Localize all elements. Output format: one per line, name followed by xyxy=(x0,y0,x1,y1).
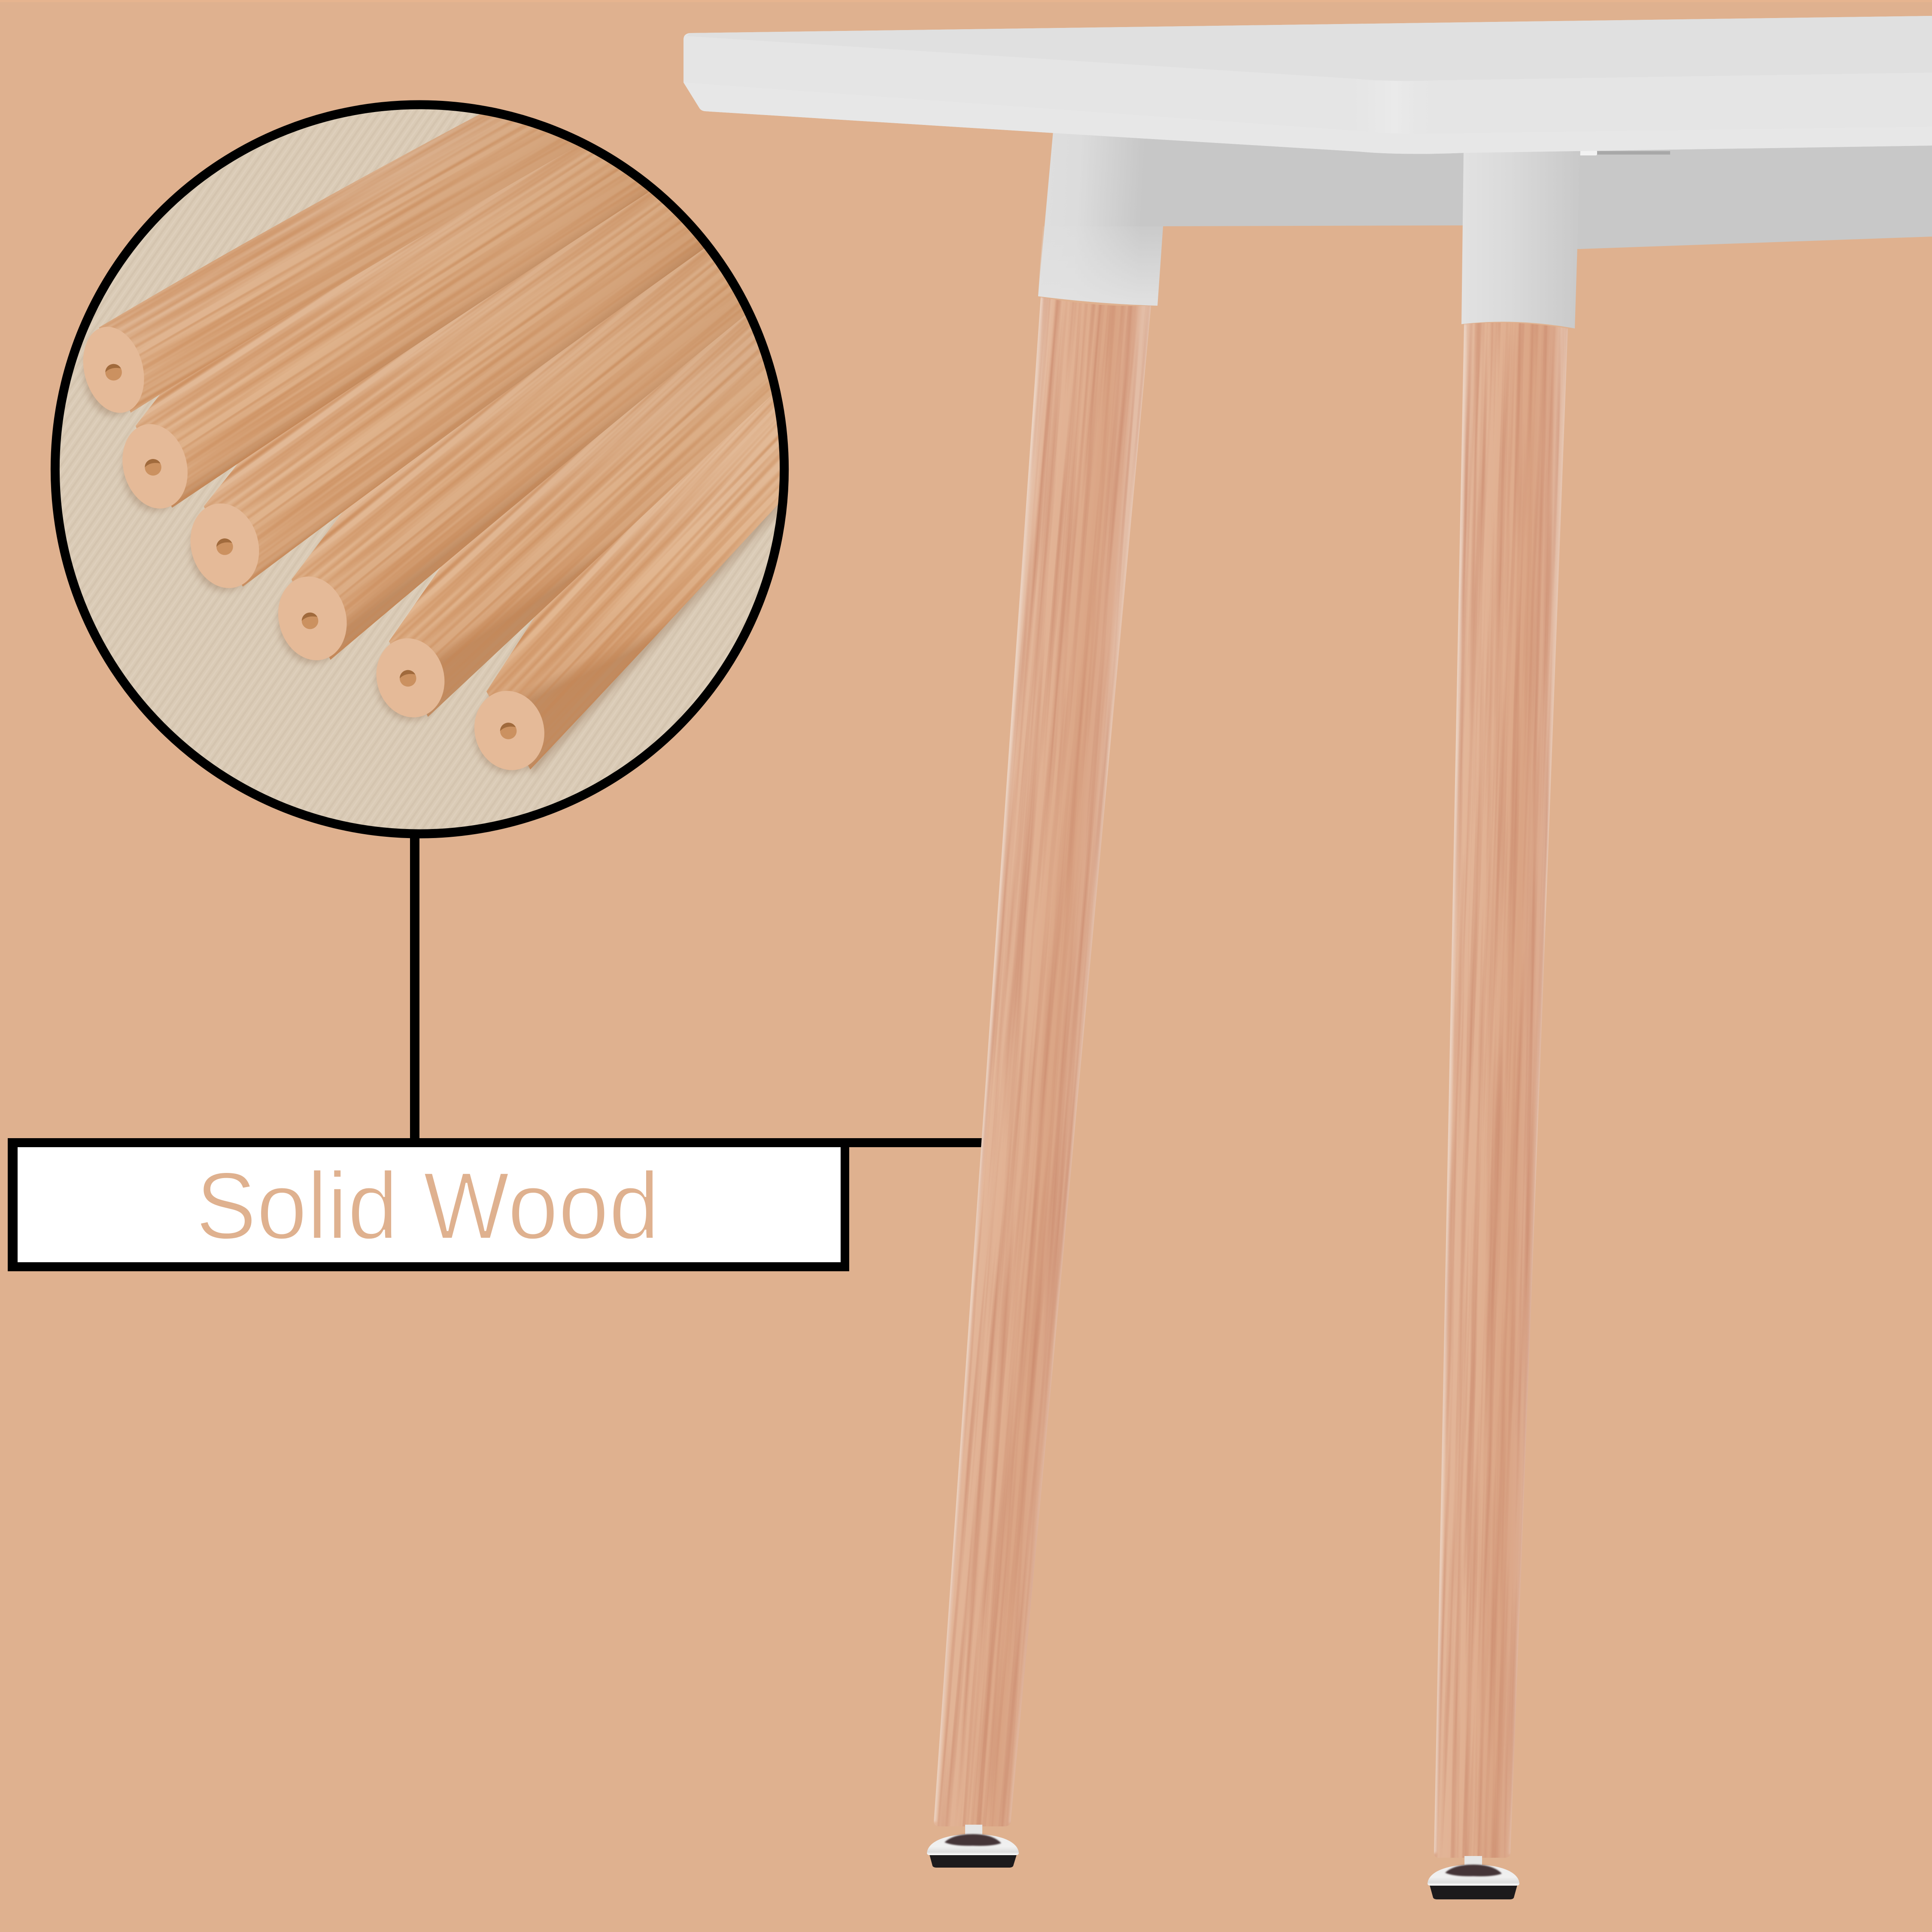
white tabletop xyxy=(683,16,1932,155)
rod 2 xyxy=(43,39,803,631)
rod end cap 5 xyxy=(368,631,453,725)
rod 4 xyxy=(43,94,854,728)
rod end cap 1 xyxy=(74,320,153,420)
table apron left xyxy=(1138,129,1466,228)
table apron right xyxy=(1576,140,1932,249)
tabletop upper surface xyxy=(687,16,1932,81)
lens content xyxy=(59,109,780,829)
left table leg xyxy=(934,297,1151,1826)
tabletop lower edge shading xyxy=(683,82,1932,154)
rod 3 xyxy=(43,94,803,679)
rod end cap 6 xyxy=(465,683,553,778)
bracket under tabletop xyxy=(1566,150,1670,155)
rod 1 xyxy=(23,0,803,582)
lens: close-up of solid wood rods xyxy=(51,100,789,838)
left leg socket xyxy=(1038,131,1163,306)
connector line: label to leg xyxy=(846,1138,985,1147)
left foot glide xyxy=(927,1825,1019,1868)
label box: Solid Wood xyxy=(8,1138,849,1271)
rod end cap 4 xyxy=(269,569,356,668)
rod shadows xyxy=(84,331,806,775)
right leg socket xyxy=(1461,150,1580,328)
connector line: lens to label xyxy=(410,833,419,1142)
right foot glide xyxy=(1428,1856,1519,1899)
rod end cap 3 xyxy=(181,495,268,596)
lens ring xyxy=(55,105,784,834)
tabletop corner highlight xyxy=(1352,79,1438,155)
rod end cap 2 xyxy=(113,417,197,516)
ribbed fabric surface xyxy=(43,94,803,855)
label text: Solid Wood xyxy=(196,1153,659,1259)
rod 6 xyxy=(43,94,1001,826)
right table leg xyxy=(1434,323,1568,1858)
rod 5 xyxy=(43,94,930,777)
